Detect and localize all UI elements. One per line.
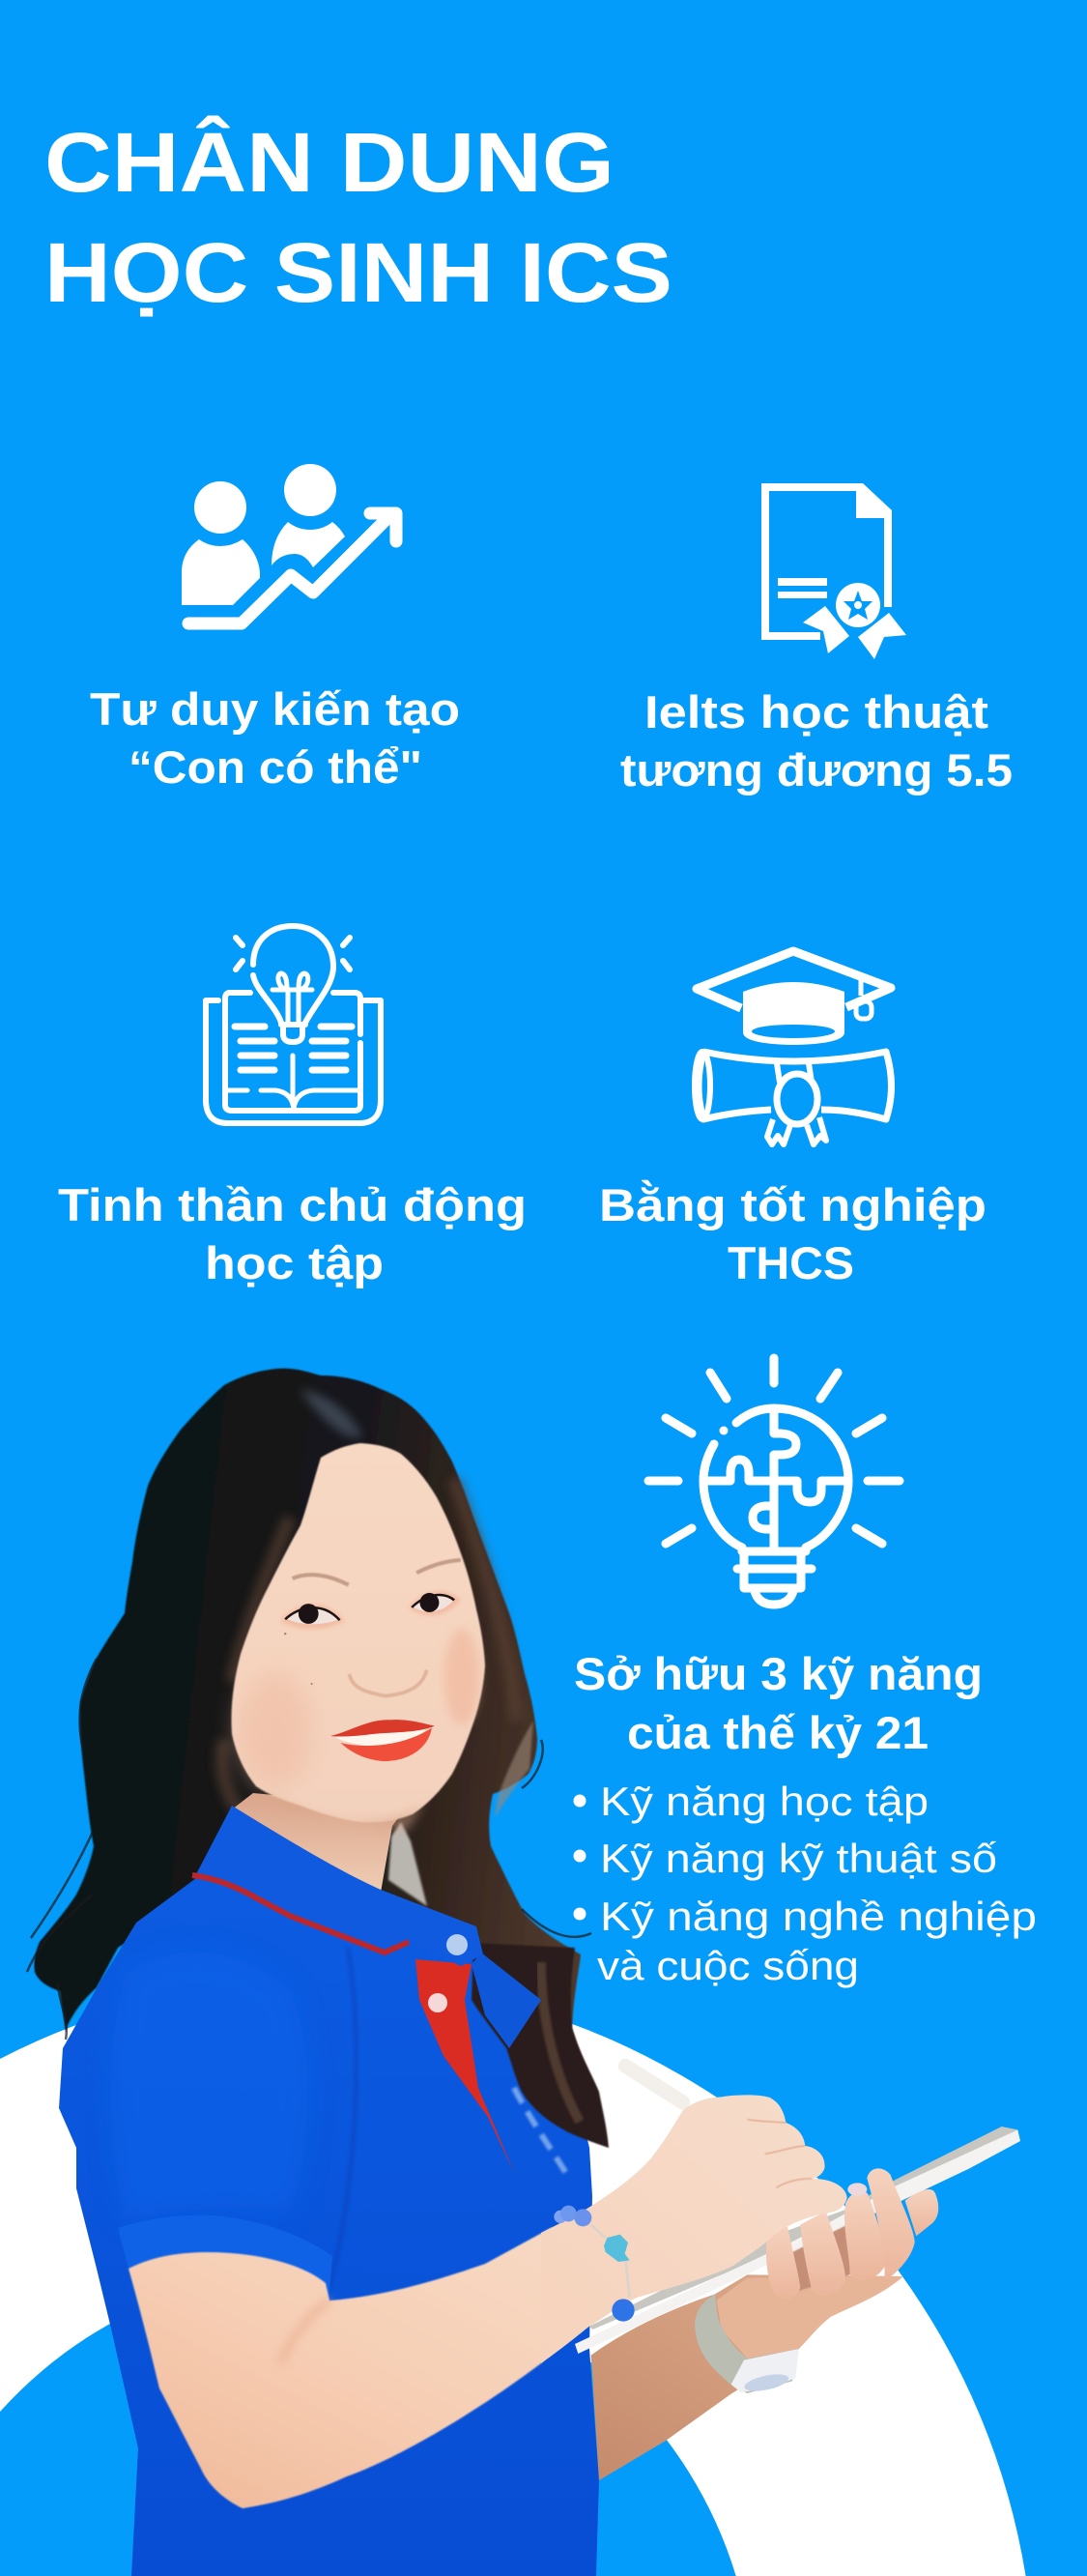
moles (284, 1633, 313, 1685)
finger gaps shadow (792, 2223, 850, 2291)
hair wisps (27, 1659, 591, 2040)
hair brown tones along the face (222, 1479, 517, 1812)
tablet (575, 2127, 1020, 2354)
hair right lock over shirt (472, 1943, 609, 2148)
icon: people with rising arrow (182, 464, 396, 623)
finger creases (747, 2120, 812, 2187)
right eye (412, 1593, 454, 1612)
icon: puzzle light bulb (648, 1358, 900, 1605)
skill list: Kỹ năng nghề nghiệp (600, 1894, 1037, 1939)
neck (232, 1793, 406, 1893)
label: Bằng tốt nghiệp (599, 1179, 987, 1288)
writing hand (541, 2095, 847, 2363)
eye shadow (280, 1591, 461, 1629)
collar (196, 1806, 483, 1966)
collar red piping (192, 1875, 409, 1953)
student figure (27, 1369, 1020, 2576)
heading: Sở hữu 3 kỹ năng (574, 1648, 983, 1758)
icon: certificate (765, 483, 906, 659)
title (44, 116, 672, 320)
icon: graduation cap and diploma (695, 951, 891, 1144)
sleeve highlight (111, 1953, 308, 2223)
nose (350, 1670, 427, 1695)
hair highlight (300, 1390, 362, 1437)
collar right flap (472, 1953, 541, 2048)
mouth (330, 1720, 435, 1761)
decorative white arc (0, 1980, 1026, 2576)
sleeve cuff (118, 2215, 332, 2305)
label: Ielts học thuật: Ielts học thuật (644, 686, 988, 738)
watch (695, 2294, 799, 2394)
grey hair behind neck (388, 1822, 427, 1906)
elbow crease (280, 2301, 329, 2363)
bracelet (554, 2206, 635, 2322)
icon: book with light bulb (206, 926, 381, 1123)
label: Tinh thần chủ động (58, 1179, 527, 1288)
label: Tư duy kiến tạo: Tư duy kiến tạo (90, 683, 460, 735)
hair light strands (495, 1721, 533, 1817)
cheek shading (239, 1672, 312, 1788)
palm (717, 2276, 903, 2359)
shirt logo streak (514, 2088, 570, 2180)
label: Bằng tốt nghiệp: Bằng tốt nghiệp (599, 1179, 987, 1230)
placket button (428, 1993, 447, 2012)
label: Tư duy kiến tạo: “Con có thể" (129, 741, 422, 793)
heading: Sở hữu 3 kỹ năng: Sở hữu 3 kỹ năng (574, 1648, 983, 1699)
chin shadow (261, 1788, 425, 1832)
stylus pen (625, 2066, 683, 2102)
label: Tinh thần chủ động: Tinh thần chủ động (58, 1179, 527, 1230)
label: Tư duy kiến tạo (90, 683, 460, 793)
label: Tinh thần chủ động: học tập (205, 1237, 384, 1288)
face (231, 1443, 485, 1822)
shirt body (59, 1856, 599, 2576)
fingernail (847, 2183, 867, 2196)
title: CHÂN DUNG (44, 116, 615, 210)
hand, tablet and watch (541, 2066, 1020, 2480)
skill list: và cuộc sống (597, 1943, 859, 1988)
skill list: Kỹ năng kỹ thuật số (600, 1836, 997, 1881)
fingers holding tablet (766, 2168, 938, 2300)
hair back (34, 1369, 605, 2144)
upper arm (129, 2223, 676, 2508)
label: Bằng tốt nghiệp: THCS (728, 1237, 854, 1288)
facial features (280, 1560, 461, 1761)
hair lock brown highlight (541, 1962, 580, 2122)
red placket (415, 1959, 515, 2175)
sleeve seam shading (329, 1948, 357, 2291)
collar button (446, 1934, 468, 1955)
left eye (285, 1604, 340, 1624)
brows (293, 1560, 461, 1585)
label: Ielts học thuật (620, 686, 1013, 796)
skill list (574, 1779, 1037, 1988)
decorative inner blue arc (0, 2269, 736, 2576)
skill list: Kỹ năng học tập (600, 1779, 929, 1824)
title: HỌC SINH ICS (44, 226, 672, 320)
heading: Sở hữu 3 kỹ năng: của thế kỷ 21 (627, 1707, 929, 1758)
right cheek shading (444, 1629, 479, 1725)
lower arm (591, 2274, 901, 2480)
label: Ielts học thuật: tương đương 5.5 (620, 744, 1013, 796)
